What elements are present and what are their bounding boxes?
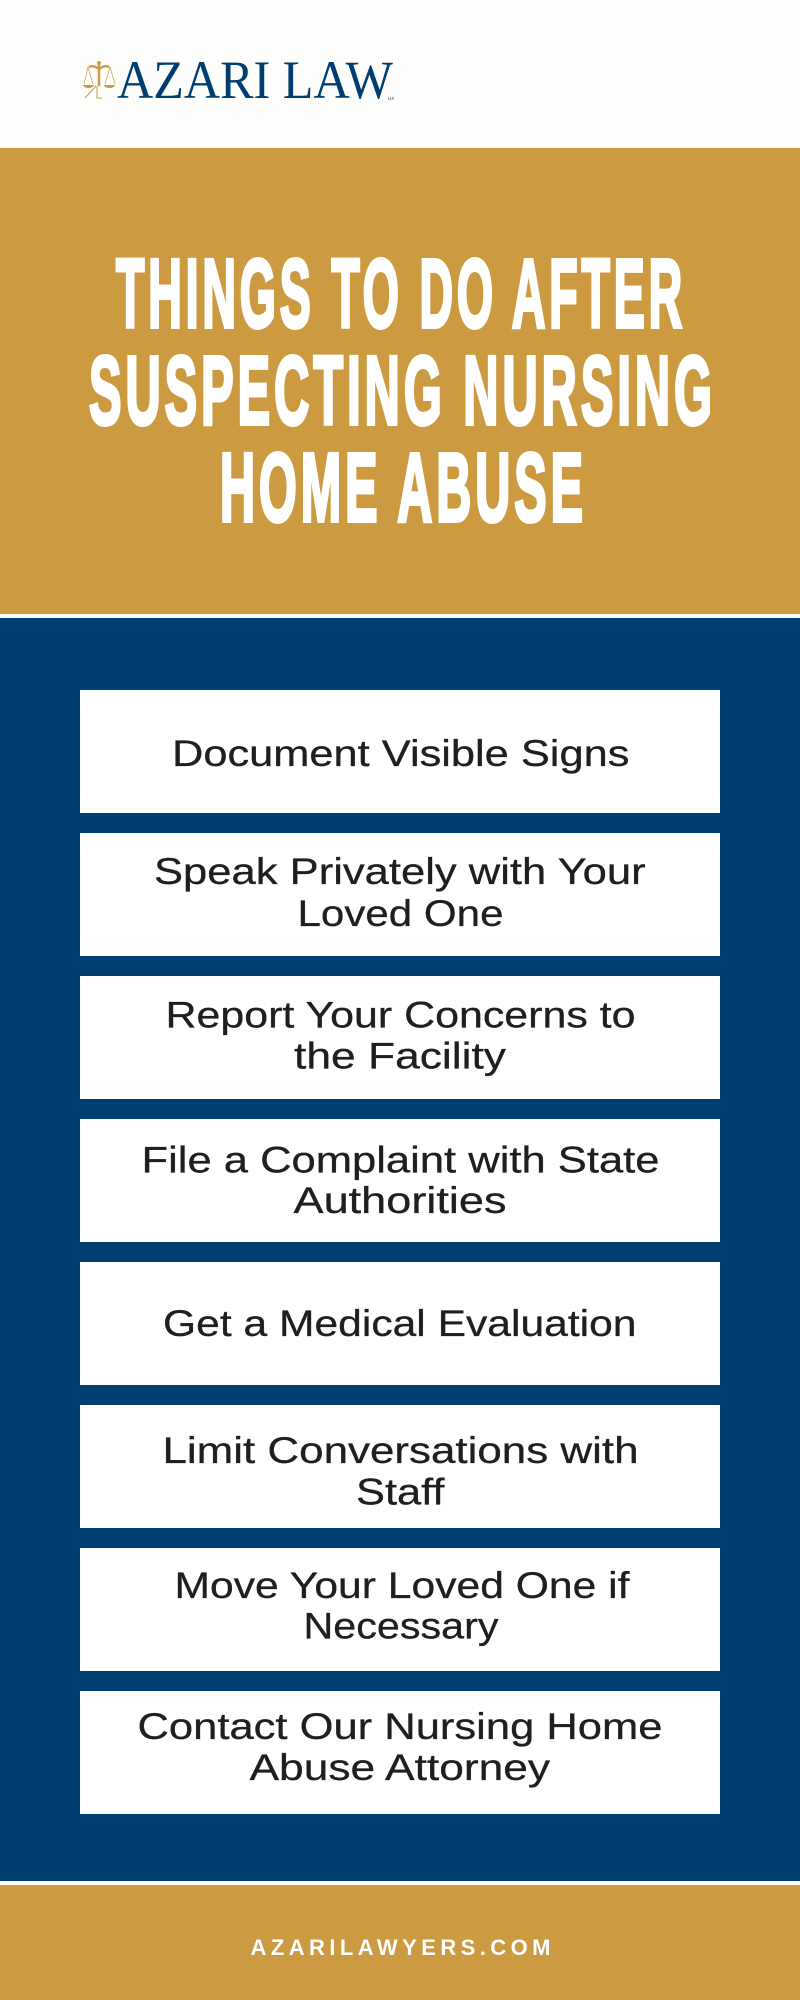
step 1 card: Document Visible Signs xyxy=(172,733,629,774)
step 8 card: Contact Our Nursing Home xyxy=(138,1706,662,1747)
step 7 card: Move Your Loved One if xyxy=(174,1565,630,1606)
step 6 card xyxy=(80,1405,720,1528)
footer band xyxy=(0,1885,800,2000)
step 4 card xyxy=(80,1119,720,1242)
step 5 card xyxy=(80,1262,720,1385)
step 4 card: File a Complaint with State xyxy=(142,1140,660,1181)
logo suffix: LLC xyxy=(388,96,394,100)
step 7 card xyxy=(80,1548,720,1671)
step 1 card xyxy=(80,690,720,813)
title xyxy=(89,239,716,542)
footer website: AZARILAWYERS.COM xyxy=(250,1935,550,1960)
step 3 card: Report Your Concerns to xyxy=(166,995,636,1036)
icon: scales of justice xyxy=(83,61,115,98)
step 8 card: Abuse Attorney xyxy=(250,1747,551,1788)
steps panel xyxy=(0,618,800,1881)
title panel xyxy=(0,148,800,614)
step 3 card xyxy=(80,976,720,1099)
step 3 card: the Facility xyxy=(294,1036,507,1077)
header band with logo xyxy=(0,0,800,148)
step 7 card: Necessary xyxy=(304,1606,499,1647)
step 2 card: Speak Privately with Your xyxy=(154,851,646,892)
step 8 card xyxy=(80,1691,720,1814)
step 6 card: Limit Conversations with xyxy=(162,1430,638,1471)
step 5 card: Get a Medical Evaluation xyxy=(163,1303,636,1344)
step 2 card xyxy=(80,833,720,956)
logo wordmark: AZARI LAW xyxy=(117,50,393,110)
step 6 card: Staff xyxy=(356,1472,445,1513)
step 2 card: Loved One xyxy=(298,893,504,934)
step 4 card: Authorities xyxy=(294,1180,506,1221)
